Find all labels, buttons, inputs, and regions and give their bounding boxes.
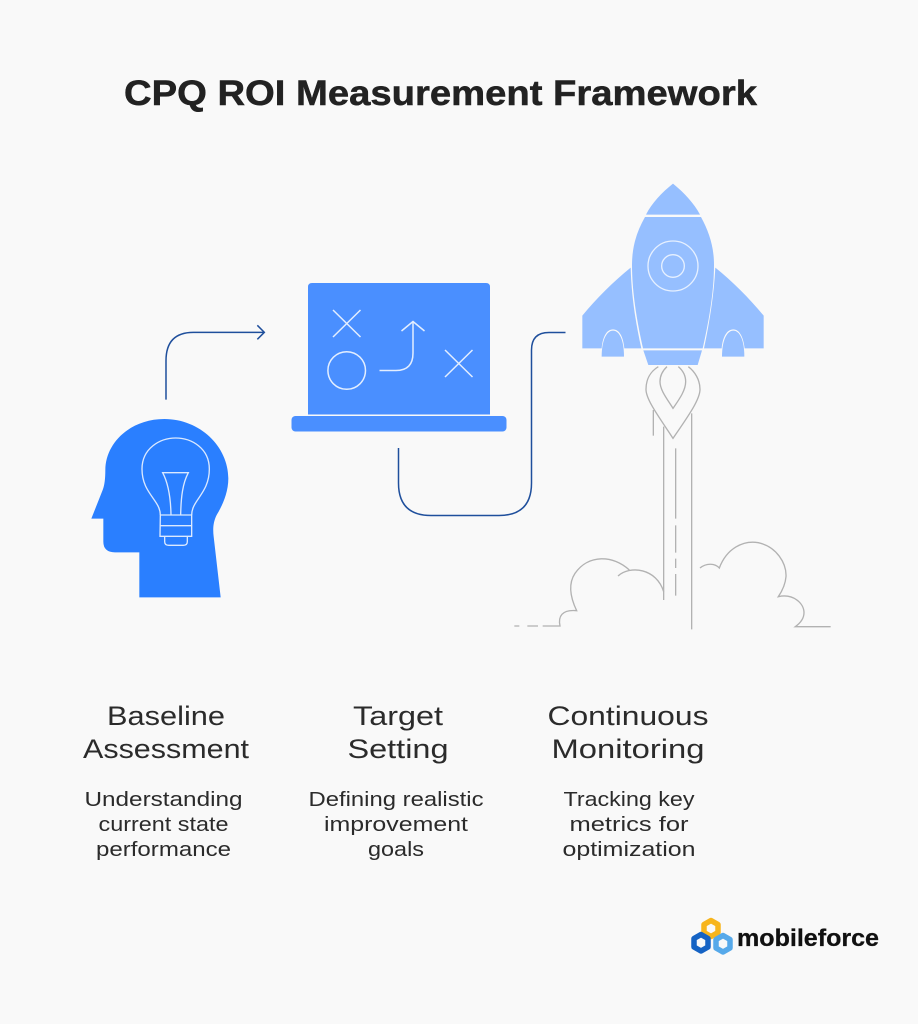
strategy marks [328, 310, 472, 389]
logo icon: hexagons [694, 920, 730, 952]
description: Tracking key [564, 788, 695, 811]
rocket window [648, 241, 698, 291]
column: continuous monitoring [548, 701, 708, 861]
laptop base [292, 416, 506, 432]
icon: rocket [582, 184, 764, 365]
column: baseline assessment: current state [98, 813, 228, 836]
icon: laptop with strategy board [292, 283, 506, 432]
arrow: laptop to rocket [398, 332, 566, 516]
rocket body [646, 184, 700, 215]
icon: head with light bulb [91, 419, 228, 597]
column: continuous monitoring: metrics for [570, 813, 689, 836]
description: Defining realistic [308, 788, 484, 811]
title: CPQ ROI Measurement Framework [124, 74, 758, 113]
column: baseline assessment: Assessment [83, 734, 250, 764]
exhaust flames [646, 367, 700, 438]
icon: light bulb [142, 438, 209, 545]
column: target setting: goals [368, 838, 424, 861]
logo wordmark: mobileforce [737, 925, 879, 952]
description: Understanding [84, 788, 242, 811]
heading: Continuous [548, 701, 708, 731]
arrow: head to laptop [166, 325, 264, 400]
laptop screen [308, 283, 490, 414]
column: baseline assessment: performance [96, 838, 231, 861]
heading: Baseline [107, 701, 225, 731]
heading: Target [353, 701, 444, 731]
column: target setting [308, 701, 484, 861]
column: continuous monitoring: optimization [562, 838, 696, 861]
column: target setting: improvement [324, 813, 468, 836]
column: target setting: Setting [348, 734, 448, 764]
column: continuous monitoring: Monitoring [552, 734, 704, 764]
logo: mobileforce [694, 920, 879, 952]
column: baseline assessment [83, 701, 250, 861]
rocket fins [582, 268, 641, 348]
smoke trail and clouds [514, 410, 831, 629]
